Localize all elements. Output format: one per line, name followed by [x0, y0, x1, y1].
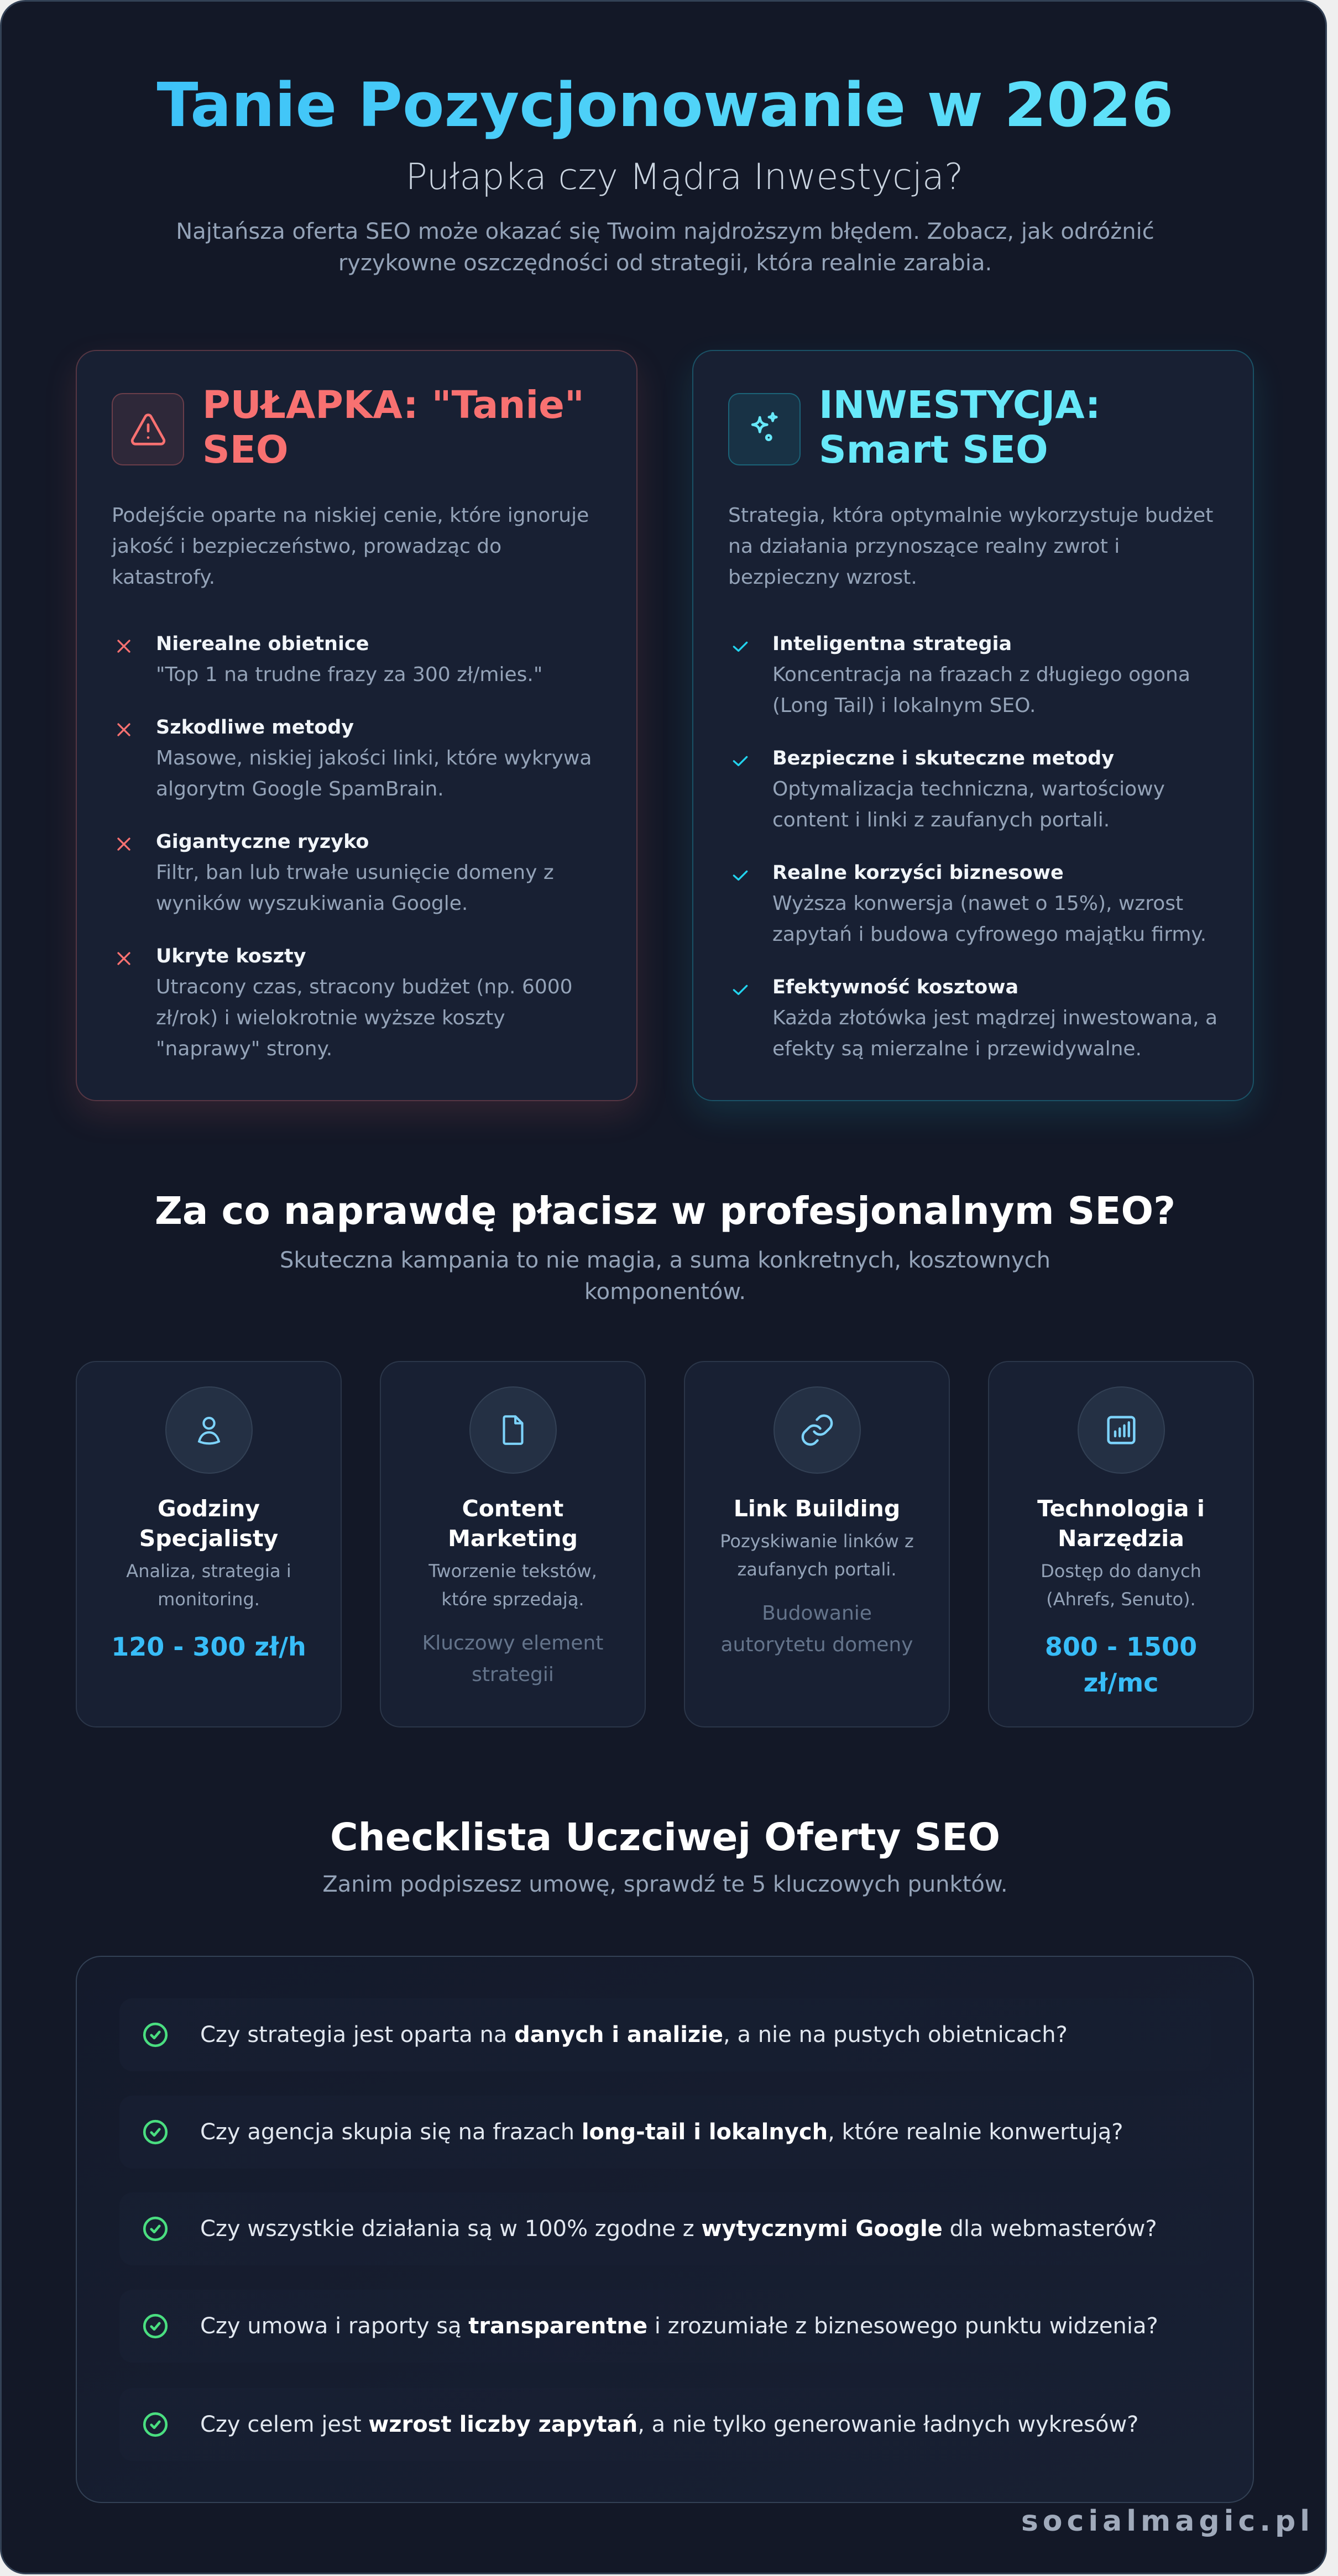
card: content marketing — [380, 1361, 646, 1727]
icon: user — [165, 1386, 252, 1474]
card: specialist hours: Specjalisty — [139, 1525, 278, 1552]
item: safe methods: Optymalizacja techniczna, wartościowy — [772, 778, 1165, 800]
icon: chart — [1077, 1386, 1164, 1474]
title: Tanie Pozycjonowanie w 2026 — [156, 70, 1174, 140]
item: huge risk: wyników wyszukiwania Google. — [156, 892, 468, 915]
list: investment items — [733, 633, 1217, 1060]
intro text — [176, 219, 1154, 276]
check item 1 — [119, 1998, 1211, 2071]
text: investment description — [728, 504, 1213, 589]
item: smart strategy — [733, 633, 1190, 717]
item: hidden costs — [117, 945, 573, 1060]
check item 3: Czy wszystkie działania są w 100% zgodne z wytycznymi Google dla webmasterów? — [200, 2216, 1157, 2242]
text: section 2 subtitle — [280, 1248, 1050, 1305]
card: content marketing: Marketing — [448, 1525, 578, 1552]
card: specialist hours — [76, 1361, 342, 1727]
item: smart strategy: (Long Tail) i lokalnym SEO. — [772, 694, 1036, 717]
list: trap items — [117, 633, 592, 1060]
card: tools: Narzędzia — [1058, 1525, 1184, 1552]
check item 5 — [119, 2388, 1211, 2461]
item: harmful methods: Masowe, niskiej jakości linki, które wykrywa — [156, 747, 592, 769]
card: specialist hours: Analiza, strategia i — [126, 1561, 291, 1582]
card: link building: Budowanie — [762, 1602, 872, 1625]
card: specialist hours: 120 - 300 zł/h — [111, 1632, 306, 1662]
item: safe methods — [733, 747, 1165, 831]
item: hidden costs: zł/rok) i wielokrotnie wyższe koszty — [156, 1007, 505, 1029]
item: business benefits: zapytań i budowa cyfrowego majątku firmy. — [772, 923, 1206, 946]
card: link building: Pozyskiwanie linków z — [720, 1531, 914, 1552]
check item 2 — [119, 2096, 1211, 2169]
card: link building: Link Building — [734, 1495, 900, 1522]
item: unrealistic promises — [117, 633, 542, 686]
card: tools: 800 - 1500 — [1045, 1632, 1197, 1662]
card: specialist hours: monitoring. — [158, 1589, 260, 1610]
heading: investment — [819, 383, 1101, 472]
card: content marketing: Content — [462, 1495, 563, 1522]
intro text: ryzykowne oszczędności od strategii, która realnie zarabia. — [338, 250, 992, 276]
item: harmful methods — [117, 716, 592, 800]
text: trap description — [111, 504, 589, 589]
item: huge risk — [117, 831, 554, 915]
icon: sparkles — [728, 393, 801, 465]
icon: warning — [112, 393, 184, 465]
check item 3 — [119, 2192, 1211, 2265]
check item 1: Czy strategia jest oparta na danych i analizie, a nie na pustych obietnicach? — [200, 2022, 1068, 2048]
card: content marketing: strategii — [472, 1663, 554, 1686]
item: business benefits — [733, 862, 1206, 946]
heading: investment: INWESTYCJA: — [819, 383, 1101, 427]
text: section 2 subtitle: Skuteczna kampania to nie magia, a suma konkretnych, kosztownych — [280, 1248, 1050, 1273]
item: hidden costs: "naprawy" strony. — [156, 1038, 332, 1060]
item: harmful methods: Szkodliwe metody — [156, 716, 354, 739]
heading: trap — [202, 383, 584, 472]
text: investment description: Strategia, która optymalnie wykorzystuje budżet — [728, 504, 1213, 527]
item: smart strategy: Inteligentna strategia — [772, 633, 1012, 655]
item: unrealistic promises: "Top 1 na trudne frazy za 300 zł/mies." — [156, 663, 542, 686]
item: unrealistic promises: Nierealne obietnice — [156, 633, 369, 655]
card: tools: zł/mc — [1084, 1668, 1158, 1698]
text: trap description: Podejście oparte na niskiej cenie, które ignoruje — [112, 504, 589, 527]
panel: trap cheap SEO — [76, 350, 637, 1101]
card: tools: Technologia i — [1037, 1495, 1205, 1522]
item: cost efficiency: Każda złotówka jest mądrzej inwestowana, a — [772, 1007, 1217, 1029]
item: business benefits: Realne korzyści biznesowe — [772, 862, 1064, 884]
card: tools — [988, 1361, 1254, 1727]
text: investment description: na działania przynoszące realny zwrot i — [728, 535, 1120, 558]
text: trap description: jakość i bezpieczeństwo, prowadząc do — [112, 535, 501, 558]
text: trap description: katastrofy. — [112, 566, 215, 589]
card: content marketing: które sprzedają. — [441, 1589, 584, 1610]
panel: checklist — [76, 1956, 1254, 2503]
check item 5: Czy celem jest wzrost liczby zapytań, a nie tylko generowanie ładnych wykresów? — [200, 2412, 1138, 2437]
item: safe methods: Bezpieczne i skuteczne metody — [772, 747, 1114, 769]
heading: investment: Smart SEO — [819, 428, 1048, 472]
card: content marketing: Kluczowy element — [422, 1632, 603, 1654]
heading: trap: PUŁAPKA: "Tanie" — [202, 383, 584, 427]
card: content marketing: Tworzenie tekstów, — [428, 1561, 597, 1582]
footer brand: socialmagic.pl — [1021, 2505, 1314, 2538]
item: business benefits: Wyższa konwersja (nawet o 15%), wzrost — [772, 892, 1183, 915]
heading: trap: SEO — [202, 428, 289, 472]
card: specialist hours: Godziny — [158, 1495, 260, 1522]
text: checklist subtitle: Zanim podpiszesz umowę, sprawdź te 5 kluczowych punktów. — [322, 1872, 1008, 1897]
item: smart strategy: Koncentracja na frazach z długiego ogona — [772, 663, 1190, 686]
item: huge risk: Gigantyczne ryzyko — [156, 831, 369, 853]
intro text: Najtańsza oferta SEO może okazać się Twoim najdroższym błędem. Zobacz, jak odróżnić — [176, 219, 1154, 244]
subtitle: Pułapka czy Mądra Inwestycja? — [406, 156, 963, 198]
check item 2: Czy agencja skupia się na frazach long-tail i lokalnych, które realnie konwertują? — [200, 2119, 1123, 2145]
check item 4: Czy umowa i raporty są transparentne i zrozumiałe z biznesowego punktu widzenia? — [200, 2313, 1158, 2339]
item: cost efficiency — [733, 976, 1217, 1060]
item: hidden costs: Ukryte koszty — [156, 945, 306, 967]
card: link building: zaufanych portali. — [738, 1559, 896, 1580]
text: investment description: bezpieczny wzrost. — [728, 566, 917, 589]
heading: what you pay for: Za co naprawdę płacisz w profesjonalnym SEO? — [155, 1189, 1175, 1233]
icon: document — [469, 1386, 556, 1474]
card: tools: (Ahrefs, Senuto). — [1046, 1589, 1196, 1610]
panel: smart SEO investment — [692, 350, 1254, 1101]
check item 4 — [119, 2290, 1211, 2363]
card: link building — [684, 1361, 950, 1727]
heading: checklist: Checklista Uczciwej Oferty SEO — [330, 1815, 1000, 1860]
item: huge risk: Filtr, ban lub trwałe usunięcie domeny z — [156, 861, 554, 884]
item: harmful methods: algorytm Google SpamBrain. — [156, 778, 444, 800]
card: tools: Dostęp do danych — [1041, 1561, 1201, 1582]
text: section 2 subtitle: komponentów. — [584, 1279, 746, 1305]
item: safe methods: content i linki z zaufanych portali. — [772, 809, 1110, 831]
item: hidden costs: Utracony czas, stracony budżet (np. 6000 — [156, 976, 573, 998]
item: cost efficiency: Efektywność kosztowa — [772, 976, 1018, 998]
icon: link — [773, 1386, 860, 1474]
item: cost efficiency: efekty są mierzalne i przewidywalne. — [772, 1038, 1142, 1060]
card: link building: autorytetu domeny — [721, 1633, 913, 1656]
